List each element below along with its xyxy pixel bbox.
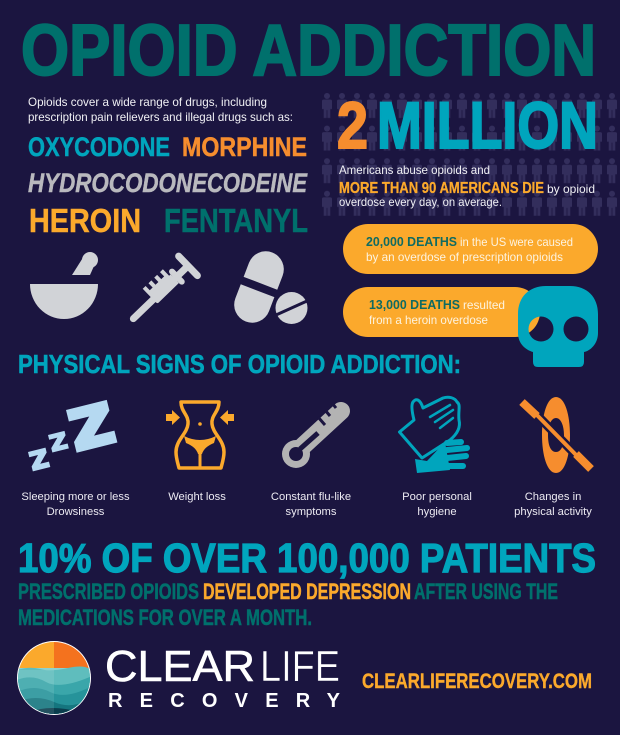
symptom labels: hygiene <box>417 506 457 518</box>
depression text: AFTER USING THE <box>414 579 558 604</box>
symptom labels <box>21 491 592 518</box>
logo wordmark: LIFE <box>260 642 340 691</box>
2 million statistic: 2 <box>337 88 368 162</box>
icon: kayak paddle <box>522 397 591 473</box>
depression text <box>18 579 558 630</box>
drug names: HEROIN <box>29 202 141 239</box>
icon: waist weight loss <box>166 402 234 468</box>
americans abuse text: overdose every day, on average. <box>339 195 502 209</box>
drug names: CODEINE <box>207 168 308 198</box>
intro text: Opioids cover a wide range of drugs, including <box>28 95 267 109</box>
callout: 20,000 deaths: in the US were caused <box>460 235 573 249</box>
depression text: MEDICATIONS FOR OVER A MONTH. <box>18 605 312 630</box>
intro text: prescription pain relievers and illegal drugs such as: <box>28 110 293 124</box>
callout: 20,000 deaths: by an overdose of prescription opioids <box>366 250 563 264</box>
callout: 13,000 deaths: from a heroin overdose <box>369 313 488 327</box>
americans abuse text: by opioid <box>547 182 595 196</box>
americans abuse text: MORE THAN 90 AMERICANS DIE <box>339 180 544 197</box>
callout: 20,000 deaths <box>343 224 598 274</box>
callout: 20,000 deaths: 20,000 DEATHS <box>366 234 457 249</box>
drug names: OXYCODONE <box>28 132 170 162</box>
people pattern background <box>320 93 620 217</box>
americans abuse text <box>339 163 595 209</box>
symptom labels: Drowsiness <box>47 506 105 518</box>
depression text: PRESCRIBED OPIOIDS <box>18 579 199 604</box>
drug names: FENTANYL <box>164 202 308 239</box>
intro text <box>28 95 293 124</box>
logo wordmark: RECOVERY <box>108 690 341 712</box>
icon: skull <box>518 286 598 367</box>
callout: 13,000 deaths: 13,000 DEATHS <box>369 297 460 312</box>
drug names <box>28 132 308 239</box>
symptom labels: Changes in <box>525 491 581 503</box>
drug names: HYDROCODONE <box>28 168 208 198</box>
symptom labels: symptoms <box>286 506 337 518</box>
symptom labels: Sleeping more or less <box>21 491 130 503</box>
logo wordmark <box>105 642 341 712</box>
icon: syringe <box>119 251 202 333</box>
callout: 13,000 deaths: resulted <box>463 298 505 312</box>
logo mark <box>17 641 92 716</box>
icon: mortar and pestle <box>30 252 98 319</box>
americans abuse text: Americans abuse opioids and <box>339 163 490 177</box>
depression text: DEVELOPED DEPRESSION <box>203 579 411 604</box>
icon: thermometer <box>282 403 341 468</box>
drug names: MORPHINE <box>182 132 307 162</box>
symptom labels: Poor personal <box>402 491 472 503</box>
icon: gloves <box>400 397 467 473</box>
callout: 13,000 deaths <box>343 287 540 337</box>
symptom labels: Constant flu-like <box>271 491 351 503</box>
heading: physical signs: PHYSICAL SIGNS OF OPIOID ADDICTION: <box>18 349 461 379</box>
icon: zzz <box>28 400 117 471</box>
logo wordmark: CLEAR <box>105 642 255 691</box>
symptom labels: physical activity <box>514 506 592 518</box>
icon: pills <box>229 246 308 328</box>
symptom labels: Weight loss <box>168 491 226 503</box>
